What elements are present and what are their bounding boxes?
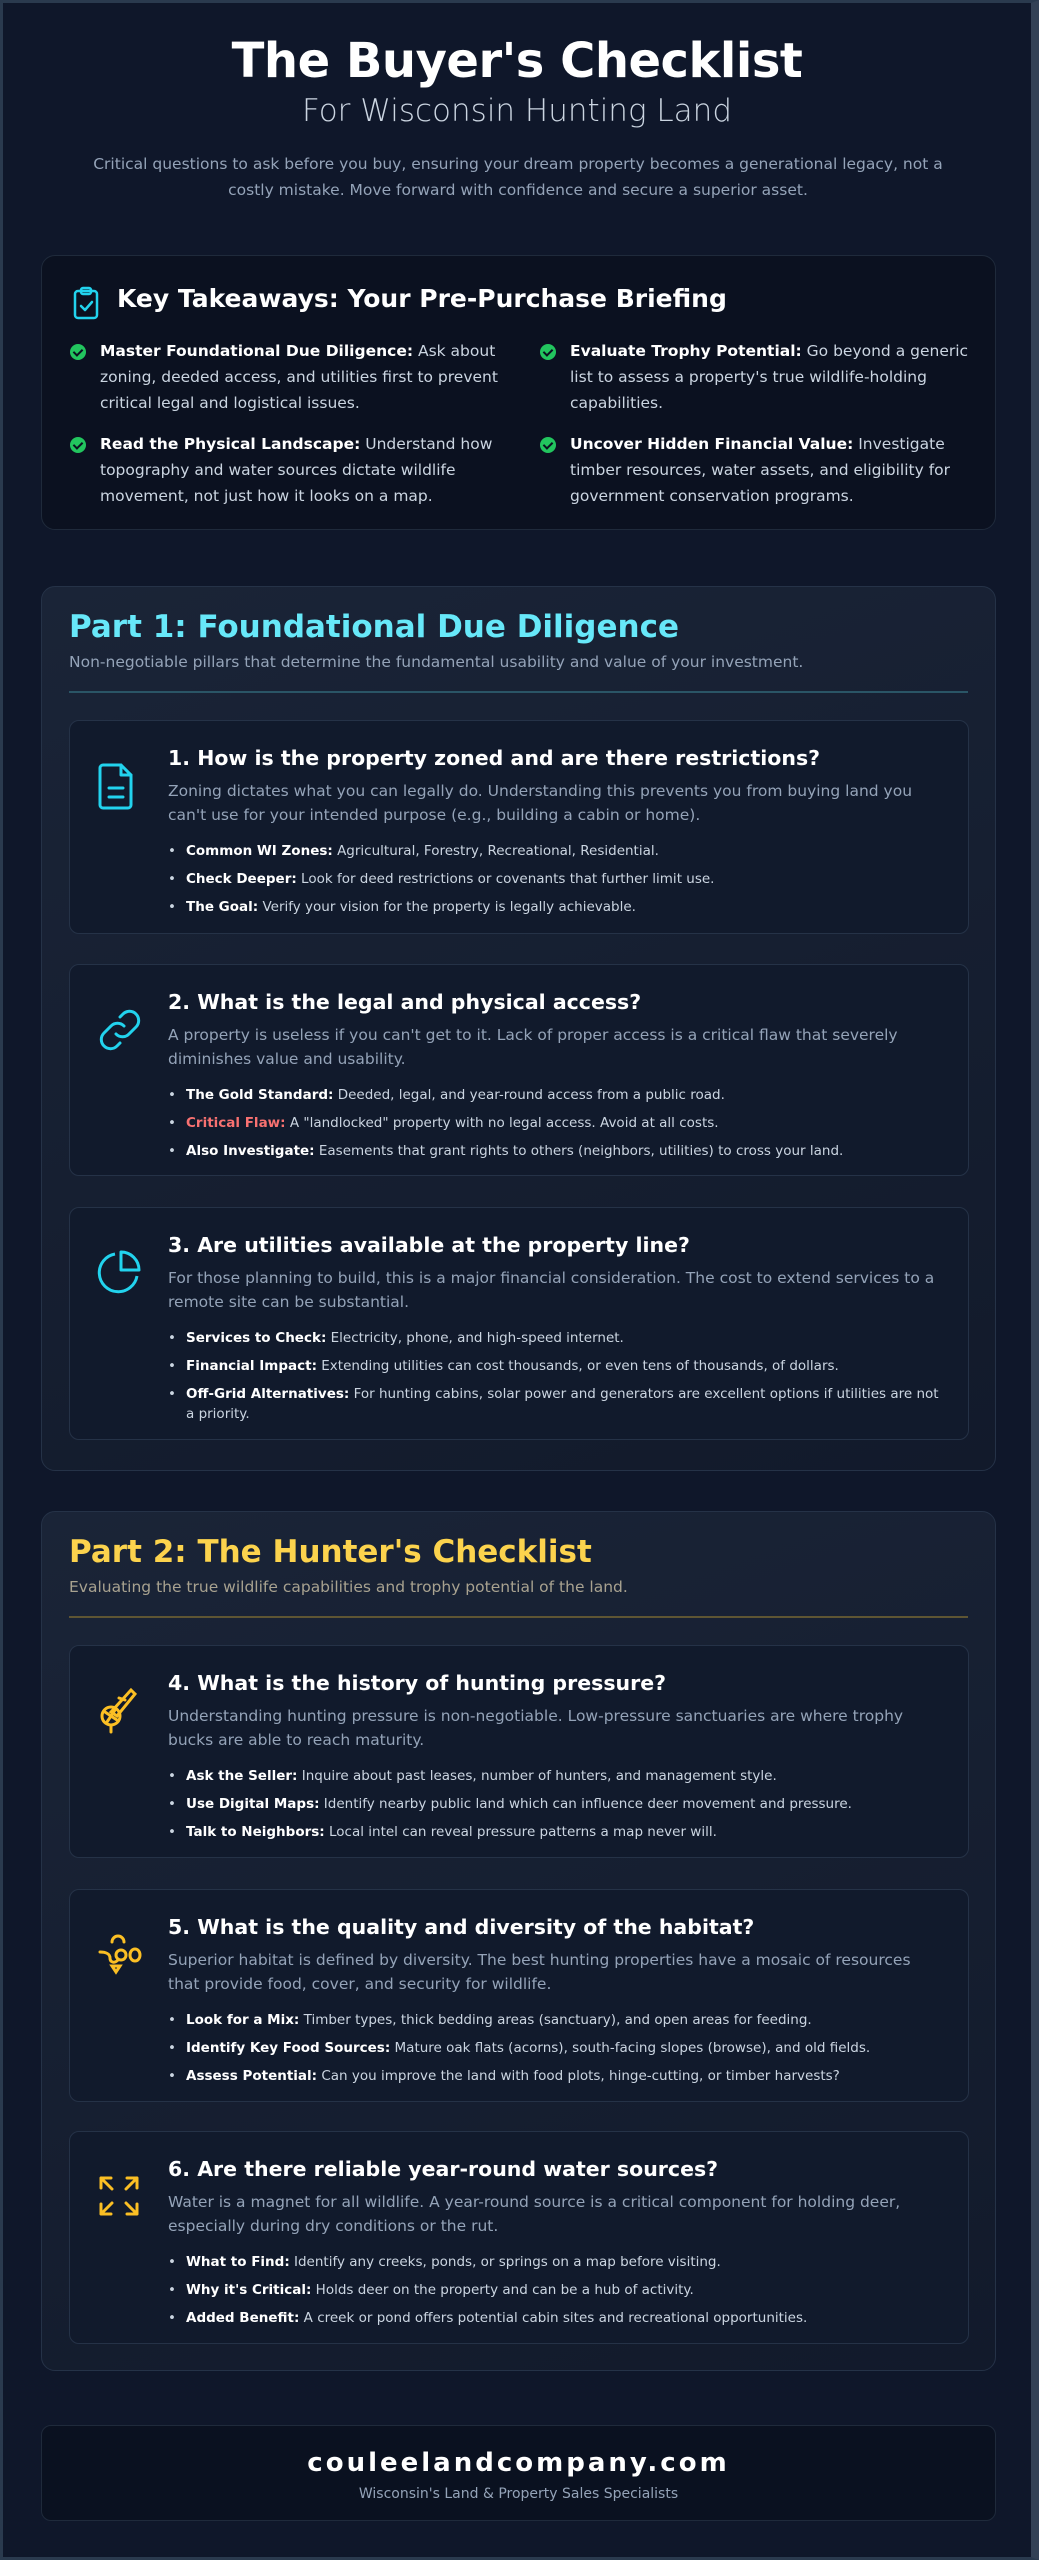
heading: part 2: Part 2: The Hunter's Checklist — [69, 1534, 592, 1570]
takeaway 3: Read the Physical Landscape: Understand how topography and water sources dictate wildlife movement, not just how it looks on a map. — [100, 435, 492, 505]
heading: part 1: Part 1: Foundational Due Diligence — [69, 609, 679, 645]
icon: link — [100, 1010, 140, 1050]
heading: key takeaways: Key Takeaways: Your Pre-Purchase Briefing — [117, 284, 727, 313]
card: hunting pressure: Understanding hunting pressure is non-negotiable. Low-pressure sanctuaries are where trophy bucks are able to reach maturity. — [168, 1707, 903, 1749]
card: habitat — [69, 1889, 969, 2102]
card: access: 2. What is the legal and physical access? — [168, 990, 641, 1014]
card: utilities: 3. Are utilities available at the property line? — [168, 1233, 690, 1257]
card: zoning: Common WI Zones: Agricultural, Forestry, Recreational, Residential. — [186, 843, 659, 859]
card: habitat: Assess Potential: Can you improve the land with food plots, hinge-cutting, or timber harvests? — [186, 2068, 840, 2084]
takeaway 4: Uncover Hidden Financial Value: Investigate timber resources, water assets, and eligibility for government conservation programs. — [570, 435, 950, 505]
icon: clipboard — [74, 286, 98, 320]
card: zoning — [69, 720, 969, 934]
card: zoning: Check Deeper: Look for deed restrictions or covenants that further limit use. — [186, 871, 714, 887]
panel: part 1 — [41, 586, 996, 1471]
footer tagline: Wisconsin's Land & Property Sales Specialists — [359, 2486, 678, 2502]
title: The Buyer's Checklist — [232, 33, 802, 89]
card: utilities — [69, 1207, 969, 1440]
card: access: Also Investigate: Easements that grant rights to others (neighbors, utilities) to cross your land. — [186, 1143, 843, 1159]
panel: key takeaways — [41, 255, 996, 530]
card: utilities: Services to Check: Electricity, phone, and high-speed internet. — [186, 1330, 624, 1346]
card: water: Added Benefit: A creek or pond offers potential cabin sites and recreational opportunities. — [186, 2310, 807, 2326]
card: habitat: Superior habitat is defined by diversity. The best hunting properties have a mosaic of resources that provide food, cover, and security for wildlife. — [168, 1951, 911, 1993]
card: water — [69, 2131, 969, 2344]
card: utilities: For those planning to build, this is a major financial consideration. The cost to extend services to a remote site can be substantial. — [168, 1269, 934, 1311]
card: access — [69, 964, 969, 1176]
footer — [41, 2425, 996, 2521]
icon: habitat — [98, 1934, 142, 1975]
takeaway 2: Evaluate Trophy Potential: Go beyond a generic list to assess a property's true wildlife-holding capabilities. — [570, 342, 968, 412]
card: hunting pressure: Ask the Seller: Inquire about past leases, number of hunters, and management style. — [186, 1768, 777, 1784]
icon: document — [98, 764, 132, 810]
card: access: The Gold Standard: Deeded, legal, and year-round access from a public road. — [186, 1087, 725, 1103]
card: water: 6. Are there reliable year-round water sources? — [168, 2157, 718, 2181]
card: water: What to Find: Identify any creeks, ponds, or springs on a map before visiting. — [186, 2254, 721, 2270]
card: hunting pressure — [69, 1645, 969, 1858]
icon: pie chart — [98, 1250, 140, 1294]
card: water: Why it's Critical: Holds deer on the property and can be a hub of activity. — [186, 2282, 694, 2298]
card: zoning: The Goal: Verify your vision for the property is legally achievable. — [186, 899, 636, 915]
card: access: A property is useless if you can't get to it. Lack of proper access is a critical flaw that severely diminishes value and usability. — [168, 1026, 898, 1068]
intro text: Critical questions to ask before you buy, ensuring your dream property becomes a generational legacy, not a costly mistake. Move forward with confidence and secure a superior asset. — [93, 155, 943, 199]
icon: expand arrows — [99, 2176, 139, 2216]
takeaway 1: Master Foundational Due Diligence: Ask about zoning, deeded access, and utilities first to prevent critical legal and logistical issues. — [100, 342, 498, 412]
card: utilities: Off-Grid Alternatives: For hunting cabins, solar power and generators are excellent options if utilities are not a priority. — [186, 1386, 939, 1422]
card: habitat: Identify Key Food Sources: Mature oak flats (acorns), south-facing slopes (browse), and old fields. — [186, 2040, 870, 2056]
card: hunting pressure: 4. What is the history of hunting pressure? — [168, 1671, 666, 1695]
subheading: part 1: Non-negotiable pillars that determine the fundamental usability and value of your investment. — [69, 653, 803, 671]
card: hunting pressure: Use Digital Maps: Identify nearby public land which can influence deer movement and pressure. — [186, 1796, 852, 1812]
card: zoning: 1. How is the property zoned and are there restrictions? — [168, 746, 820, 770]
icon: scope — [100, 1688, 137, 1734]
subheading: part 2: Evaluating the true wildlife capabilities and trophy potential of the land. — [69, 1578, 628, 1596]
card: habitat: Look for a Mix: Timber types, thick bedding areas (sanctuary), and open areas for feeding. — [186, 2012, 812, 2028]
card: water: Water is a magnet for all wildlife. A year-round source is a critical component for holding deer, especially during dry conditions or the rut. — [168, 2193, 900, 2235]
card: zoning: Zoning dictates what you can legally do. Understanding this prevents you from buying land you can't use for your intended purpose (e.g., building a cabin or home). — [168, 782, 912, 824]
footer brand: couleelandcompany.com — [307, 2448, 730, 2478]
card: habitat: 5. What is the quality and diversity of the habitat? — [168, 1915, 754, 1939]
subtitle: For Wisconsin Hunting Land — [302, 93, 732, 129]
card: hunting pressure: Talk to Neighbors: Local intel can reveal pressure patterns a map never will. — [186, 1824, 717, 1840]
panel: part 2 — [41, 1511, 996, 2371]
card: utilities: Financial Impact: Extending utilities can cost thousands, or even tens of thousands, of dollars. — [186, 1358, 839, 1374]
card: access: Critical Flaw: A "landlocked" property with no legal access. Avoid at all costs. — [186, 1115, 719, 1131]
